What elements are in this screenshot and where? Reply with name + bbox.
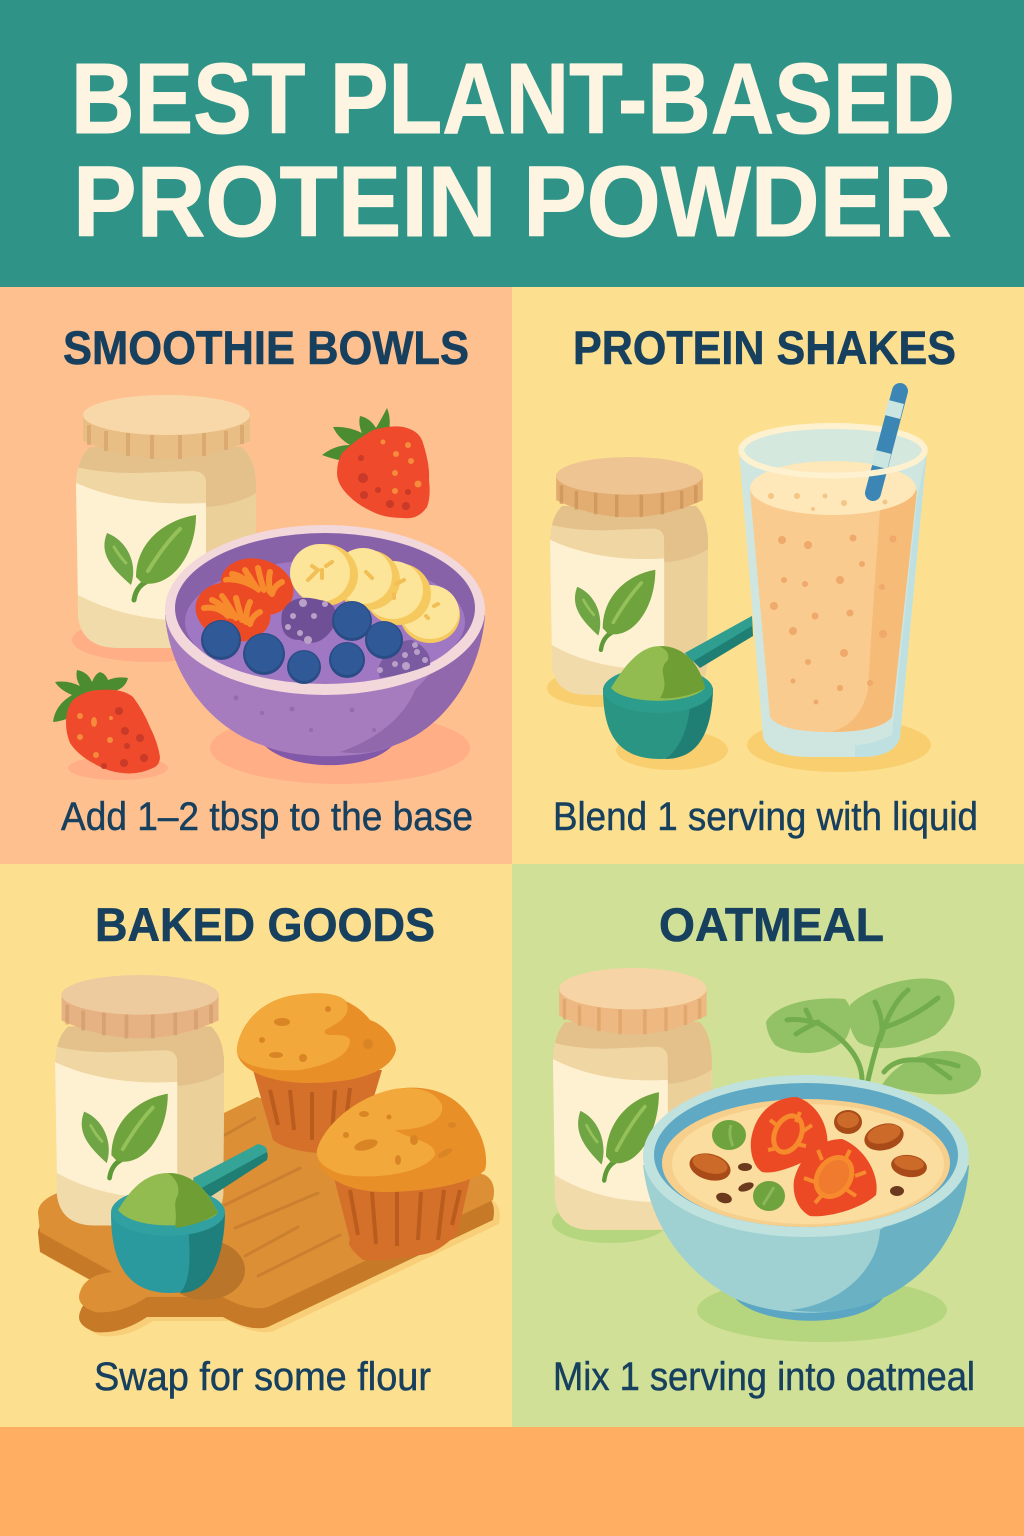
oatmeal toppings: strawberry halves: [751, 1097, 877, 1216]
panel: smoothie bowls: [0, 287, 512, 864]
caption: protein shakes: Blend 1 serving with liquid: [553, 795, 978, 839]
toppings: blueberries: [201, 601, 403, 684]
shadows: [552, 1201, 947, 1342]
scoop shadow: [165, 1240, 245, 1300]
caption: oatmeal: Mix 1 serving into oatmeal: [553, 1355, 975, 1399]
icon: strawberry top right: [322, 408, 430, 518]
icon: back muffin: [237, 993, 396, 1153]
title: PROTEIN POWDER: [73, 146, 952, 258]
icon: glass of shake with straw: [739, 391, 927, 757]
icon: green plant: [766, 979, 981, 1094]
heading: oatmeal: OATMEAL: [659, 898, 884, 951]
icon: scoop with green powder: [111, 1144, 268, 1293]
heading: smoothie bowls: SMOOTHIE BOWLS: [63, 321, 469, 374]
oatmeal toppings: spinach leaves: [712, 1120, 785, 1211]
jar shadow: [72, 618, 228, 662]
header band: [0, 0, 1024, 287]
caption: baked goods: Swap for some flour: [94, 1355, 431, 1399]
toppings: banana slices: [290, 544, 460, 643]
heading: protein shakes: PROTEIN SHAKES: [573, 321, 956, 374]
footer band: [0, 1427, 1024, 1536]
panel: protein shakes: [512, 287, 1024, 864]
toppings: strawberry slices: [189, 550, 300, 650]
icon: protein powder jar: [76, 395, 256, 648]
oatmeal toppings: nuts: [686, 1110, 928, 1205]
icon: strawberry bottom left: [53, 670, 168, 780]
heading: baked goods: BAKED GOODS: [95, 898, 435, 951]
shadows: [547, 669, 931, 772]
bowl shadow: [210, 712, 470, 784]
icon: purple smoothie bowl: [165, 525, 485, 765]
icon: protein powder jar: [55, 975, 224, 1225]
icon: wooden cutting board: [38, 1097, 500, 1336]
caption: smoothie bowls: Add 1–2 tbsp to the base: [61, 795, 473, 839]
icon: scoop with green powder: [603, 616, 753, 759]
icon: protein powder jar: [553, 968, 712, 1230]
icon: protein powder jar: [550, 457, 708, 695]
panel: baked goods: [0, 864, 512, 1427]
icon: blue oatmeal bowl: [643, 1075, 969, 1321]
icon: front muffin: [317, 1088, 486, 1260]
title: [71, 43, 955, 258]
toppings: chia clusters: [281, 598, 430, 678]
panel: oatmeal: [512, 864, 1024, 1427]
